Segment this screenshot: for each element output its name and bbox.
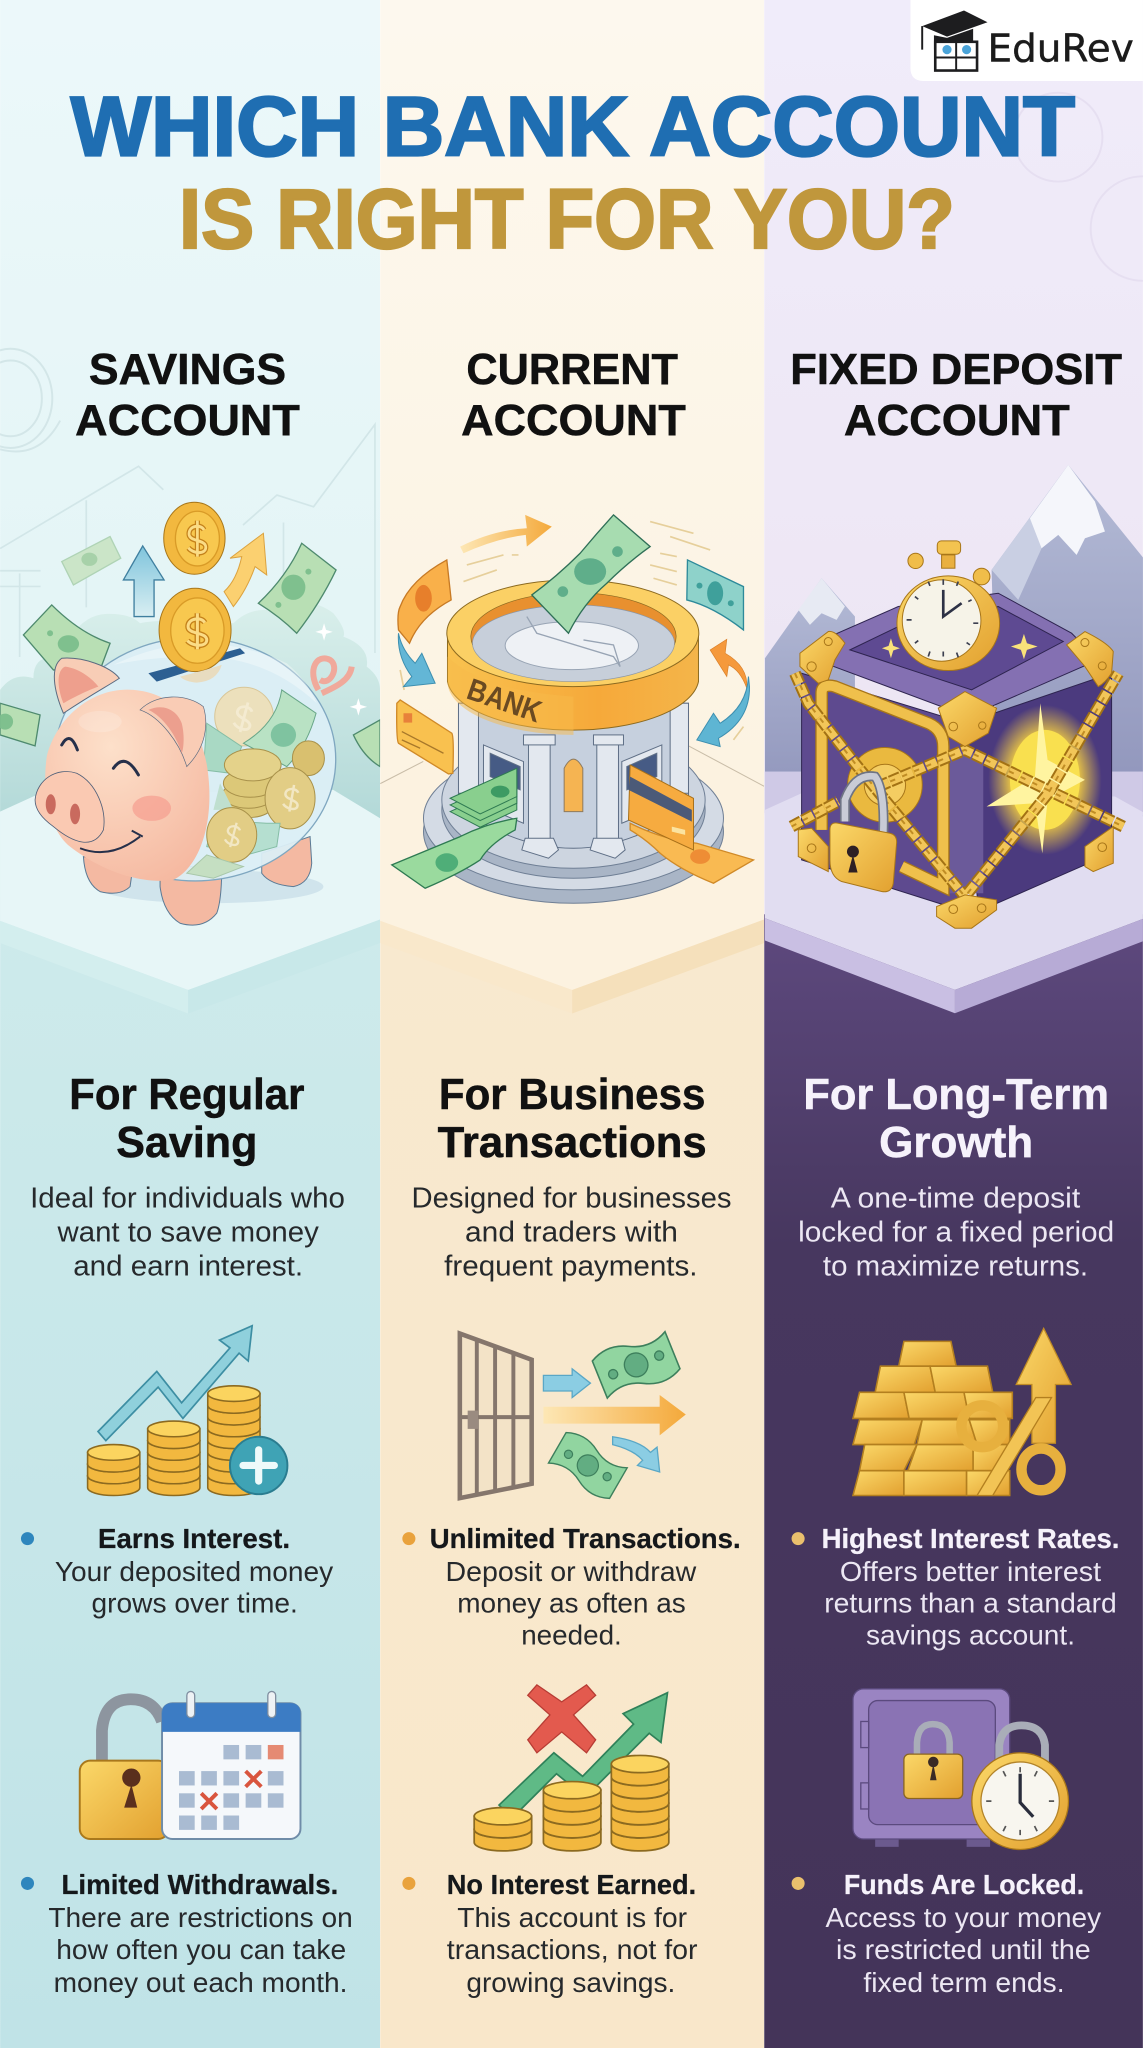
sparkles: [882, 634, 1038, 659]
left blue arrow: [398, 633, 435, 687]
banknote stack: [450, 768, 517, 827]
text: unlimited transactions: money as often as: [457, 1587, 686, 1618]
text: highest interest rates: returns than a standard: [824, 1587, 1117, 1618]
heading: savings account: [75, 346, 300, 445]
description: current: frequent payments.: [444, 1250, 698, 1282]
right teal note: [687, 560, 743, 630]
subheading: for business transactions: For Business: [439, 1071, 705, 1119]
text: limited withdrawals: [48, 1869, 353, 1998]
lower banknote: [546, 1428, 630, 1502]
face highlight: [78, 711, 122, 732]
right blue arrow: [697, 677, 749, 747]
decorative coin outlines: [1014, 93, 1143, 281]
description: fixed deposit: locked for a fixed period: [798, 1216, 1114, 1248]
title: [71, 78, 1075, 266]
text: unlimited transactions: Deposit or withdraw: [445, 1556, 697, 1587]
lower blue arrow: [613, 1437, 660, 1472]
padlock: [830, 776, 897, 892]
heading: fixed deposit account: [790, 346, 1122, 445]
windows: [483, 745, 662, 823]
heading: current account: ACCOUNT: [461, 397, 686, 445]
faint chart lines: [0, 424, 375, 657]
text: earns interest: grows over time.: [91, 1587, 298, 1618]
gold ring: [447, 633, 698, 730]
pig shadow: [97, 870, 323, 903]
stopwatch: [897, 541, 1000, 671]
heading: current account: CURRENT: [466, 346, 678, 394]
pig body: [45, 690, 209, 881]
heading: savings account: ACCOUNT: [75, 397, 300, 445]
bullet: highest interest rates: [792, 1532, 805, 1545]
graduation cap and book face: [922, 10, 988, 71]
background banknotes: [0, 537, 380, 767]
subheading: for regular saving: Saving: [116, 1119, 257, 1167]
text: earns interest: [55, 1523, 333, 1618]
dial: [848, 748, 922, 822]
description: current: [412, 1183, 732, 1282]
glow: [987, 703, 1102, 855]
illustration: bank: [392, 515, 753, 903]
text: earns interest: Earns Interest.: [98, 1523, 290, 1554]
bullet: unlimited transactions: [402, 1532, 415, 1545]
heading: fixed deposit account: FIXED DEPOSIT: [790, 346, 1122, 394]
wordmark: EduRev: [987, 26, 1134, 70]
corner brackets: [798, 631, 1113, 928]
mountains: [765, 465, 1143, 817]
left orange note: [398, 560, 451, 643]
subheading: for long-term growth: For Long-Term: [803, 1071, 1109, 1119]
right ear: [140, 697, 206, 767]
platform: [765, 793, 1143, 1013]
BANK label: BANK: [463, 672, 546, 729]
heading: fixed deposit account: ACCOUNT: [844, 397, 1070, 445]
text: limited withdrawals: how often you can take: [56, 1934, 346, 1965]
text: no interest earned: [447, 1869, 698, 1998]
panel: savings account column: [0, 0, 380, 2048]
icon: open gate with money flowing: [460, 1327, 686, 1502]
left card: [397, 700, 453, 774]
illustration: piggy bank: [0, 502, 380, 925]
subheading: for regular saving: [69, 1071, 305, 1167]
soft green clouds: [0, 603, 380, 818]
text: funds are locked: Funds Are Locked.: [844, 1869, 1084, 1900]
orange arrow: [543, 1395, 686, 1435]
smile: [80, 831, 143, 852]
heading: current account: [461, 346, 686, 445]
platform: [380, 746, 764, 1014]
top coin: [164, 502, 225, 574]
motion lines: [400, 522, 743, 740]
text: funds are locked: [826, 1869, 1101, 1998]
top banknote: [590, 1327, 682, 1403]
ribbon banknote: [392, 818, 517, 888]
subheading: for long-term growth: [803, 1071, 1109, 1167]
description: savings: Ideal for individuals who: [30, 1183, 345, 1215]
title: IS RIGHT FOR YOU?: [179, 171, 955, 266]
description: savings: [30, 1183, 345, 1282]
blue arrow: [123, 546, 164, 617]
text: limited withdrawals: There are restrictions on: [48, 1902, 353, 1933]
chains: [792, 673, 1123, 897]
panel: fixed deposit column: [764, 0, 1143, 2048]
text: limited withdrawals: money out each month.: [54, 1967, 347, 1998]
slot coin: [159, 588, 231, 672]
bullet: limited withdrawals: [21, 1877, 34, 1890]
bullet: no interest earned: [402, 1877, 415, 1890]
subheading: for long-term growth: Growth: [879, 1119, 1033, 1167]
platform: [0, 799, 380, 990]
description: fixed deposit: to maximize returns.: [823, 1250, 1088, 1282]
description: savings: and earn interest.: [73, 1250, 303, 1282]
subheading: for business transactions: Transactions: [438, 1119, 707, 1167]
tail: [313, 658, 352, 693]
centre banknote: [532, 515, 650, 633]
text: highest interest rates: Highest Interest Rates.: [822, 1523, 1119, 1554]
description: savings: want to save money: [57, 1216, 319, 1248]
building: [458, 703, 688, 848]
icon: red cross over growth arrow and coins: [474, 1685, 669, 1851]
left ear: [54, 658, 119, 713]
icon: safe with padlock and clock: [853, 1689, 1068, 1849]
panel: current account column: [380, 0, 764, 2048]
icon: padlock and calendar: [80, 1691, 300, 1839]
text: funds are locked: is restricted until the: [836, 1934, 1091, 1965]
text: no interest earned: No Interest Earned.: [447, 1869, 696, 1900]
subheading: for business transactions: [438, 1071, 707, 1167]
illustration: locked safe: [765, 465, 1143, 1013]
text: unlimited transactions: Unlimited Transactions.: [430, 1523, 741, 1554]
sparkles: [315, 623, 367, 716]
text: unlimited transactions: [430, 1523, 741, 1650]
icon: coins growing with arrow: [88, 1326, 287, 1496]
columns: [458, 703, 688, 858]
text: no interest earned: transactions, not for: [447, 1934, 698, 1965]
blue arrow: [543, 1369, 590, 1398]
slot: [148, 648, 245, 682]
description: current: Designed for businesses: [411, 1183, 732, 1215]
description: fixed deposit: [798, 1183, 1114, 1282]
right orange arrow: [710, 639, 747, 688]
description: current: and traders with: [465, 1216, 678, 1248]
door frame: [822, 686, 943, 887]
stepped base: [423, 766, 724, 904]
text: unlimited transactions: needed.: [521, 1619, 622, 1650]
icon: gold bars and percent: [853, 1328, 1071, 1496]
text: highest interest rates: savings account.: [866, 1619, 1075, 1650]
rivets: [807, 638, 1107, 914]
gold arrow: [224, 533, 267, 607]
decorative coin outline: [0, 349, 60, 452]
coins and notes inside: [187, 687, 324, 878]
text: no interest earned: This account is for: [457, 1902, 687, 1933]
text: funds are locked: fixed term ends.: [863, 1967, 1065, 1998]
text: limited withdrawals: Limited Withdrawals.: [61, 1869, 338, 1900]
description: fixed deposit: A one-time deposit: [831, 1183, 1080, 1215]
pig legs: [83, 837, 312, 925]
text: funds are locked: Access to your money: [826, 1902, 1101, 1933]
right card: [628, 765, 693, 850]
eyes: [62, 738, 138, 775]
bullet: earns interest: [21, 1532, 34, 1545]
text: highest interest rates: Offers better interest: [840, 1556, 1101, 1587]
subheading: for regular saving: For Regular: [69, 1071, 305, 1119]
door: [564, 759, 583, 812]
text: no interest earned: growing savings.: [466, 1967, 675, 1998]
text: highest interest rates: [822, 1523, 1119, 1650]
text: earns interest: Your deposited money: [55, 1556, 333, 1587]
heading: savings account: SAVINGS: [89, 346, 286, 394]
cheek: [132, 796, 171, 821]
glass body: [54, 638, 336, 881]
safe faces: [802, 593, 1112, 912]
orange note: [630, 823, 753, 883]
title: WHICH BANK ACCOUNT: [71, 78, 1075, 173]
snout: [35, 772, 104, 842]
logo: EduRev: [910, 0, 1143, 81]
top arrow: [460, 515, 552, 553]
bullet: funds are locked: [792, 1877, 805, 1890]
